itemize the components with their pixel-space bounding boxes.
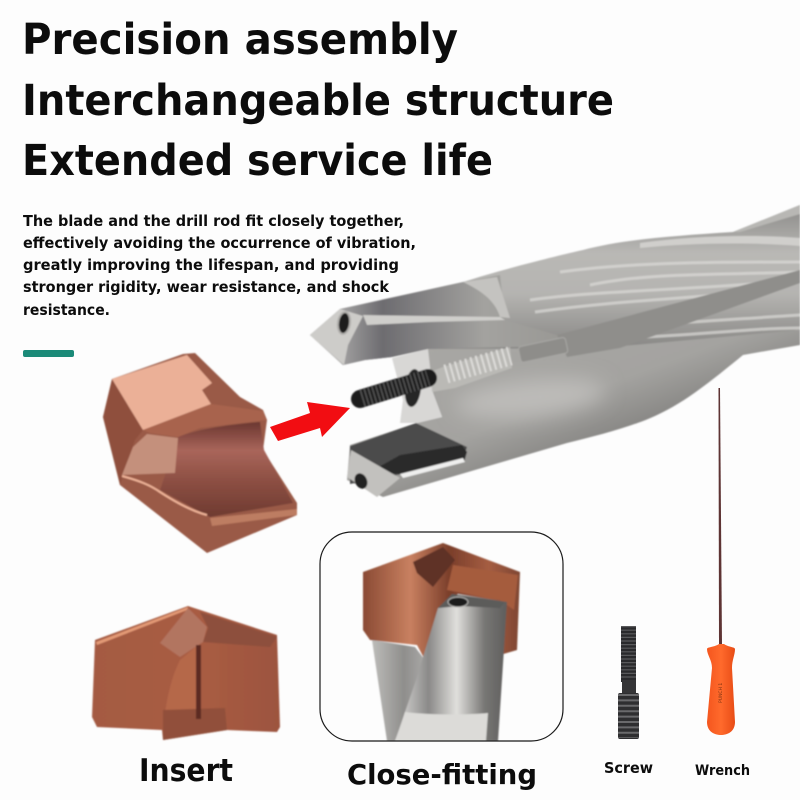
wrench: PUNCH 1: [718, 683, 724, 703]
copper insert small: [92, 606, 280, 740]
drill lower body: [347, 330, 800, 497]
close-fitting panel: [320, 532, 563, 741]
title: Precision assembly: [22, 15, 458, 65]
description text block: The blade and the drill rod fit closely together,: [23, 212, 404, 230]
label: Close-fitting: Close-fitting: [347, 758, 537, 791]
drill body illustration: [310, 205, 800, 497]
screw: [618, 626, 639, 739]
red arrow: [270, 402, 350, 441]
upper arm tip: [310, 275, 600, 365]
green accent bar: [23, 350, 74, 357]
copper insert large: [103, 353, 297, 553]
insert light top face: [112, 355, 212, 430]
label: Insert: Insert: [139, 753, 233, 789]
panel border: [320, 532, 563, 741]
screw hole lower: [352, 471, 370, 491]
drill upper body with flutes: [310, 205, 800, 365]
black screw thread: [360, 378, 428, 399]
title: Interchangeable structure: [22, 76, 614, 126]
panel copper tip: [363, 543, 520, 660]
insert light patch: [122, 434, 178, 475]
description text block: stronger rigidity, wear resistance, and shock: [23, 278, 390, 296]
label: Screw: Screw: [604, 759, 653, 777]
title: Extended service life: [22, 136, 493, 186]
label: Wrench: Wrench: [695, 763, 750, 779]
screw hole upper: [337, 311, 351, 335]
panel silver cylinder: [395, 594, 507, 741]
seat plate: [392, 349, 442, 423]
description text block: greatly improving the lifespan, and providing: [23, 256, 399, 274]
wrench: [707, 388, 735, 735]
title: [22, 15, 614, 186]
panel drill cone: [372, 640, 425, 741]
insert flute: [160, 422, 293, 517]
description text block: [23, 212, 416, 319]
description text block: effectively avoiding the occurrence of vibration,: [23, 234, 416, 252]
description text block: resistance.: [23, 301, 110, 319]
diagonal land band: [557, 270, 800, 357]
flute streaks: [530, 262, 800, 338]
ghost screw: [430, 337, 568, 392]
